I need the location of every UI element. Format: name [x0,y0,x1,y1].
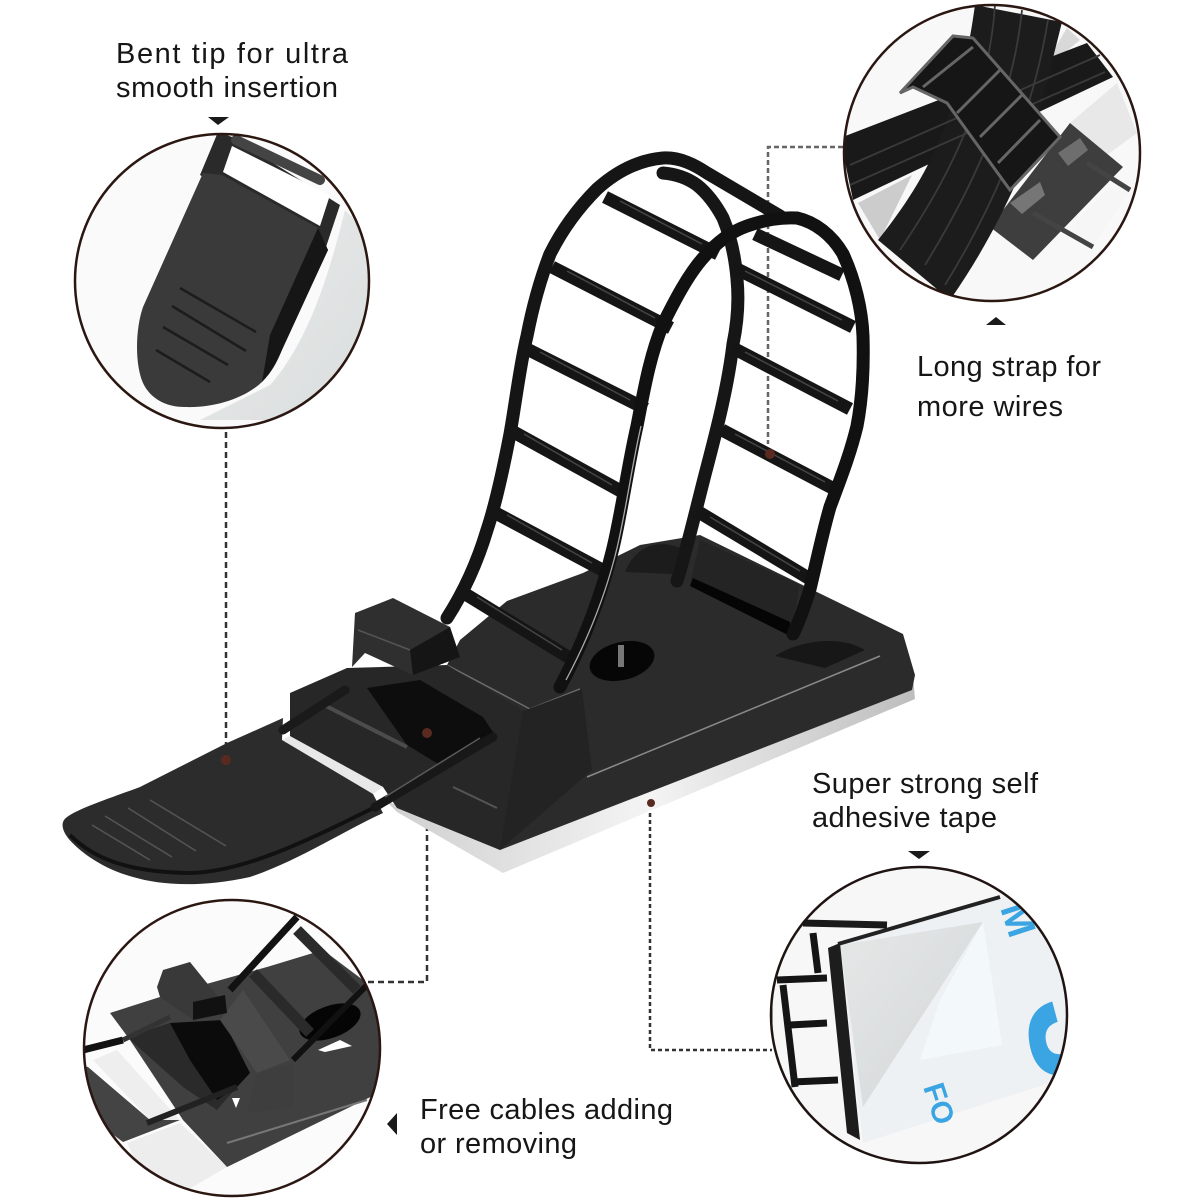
caption: free cables: or removing [420,1128,577,1160]
circle background [84,900,380,1196]
left rung highlights [477,201,702,650]
printed 3M logo fragment: 3 [992,979,1172,1091]
right ladder rungs [697,234,853,582]
caption: adhesive tape: Super strong self [812,768,1039,800]
frame recess [367,680,495,765]
outer rail [447,158,780,618]
circle outline [771,867,1067,1163]
main product: adjustable cable clip [63,158,915,884]
caption: free cables: Free cables adding [420,1094,673,1126]
strap tip lower rim [70,807,375,873]
riser lower shadow [690,578,790,636]
lower ledge highlight [453,787,497,808]
caption: long strap: more wires [917,391,1063,423]
leader line: bent tip [225,432,227,748]
strap rail highlight [385,738,480,797]
right foot mound [775,641,865,668]
connector dots [221,449,775,807]
leader line: long strap [768,147,843,444]
housing top edge highlight [447,665,580,709]
strap tip [63,718,383,884]
back mound [625,544,680,574]
arrow: bent tip [208,117,229,125]
circle outline [84,900,380,1196]
arrow: adhesive tape [908,851,930,859]
base plate edge highlight [587,656,880,777]
detail circle: free cables lock [80,900,385,1200]
adhesive tape layer [385,675,915,873]
strap and cables contents [840,5,1137,300]
lock contents [80,917,385,1200]
arrow: long strap [986,317,1006,325]
tape contents [772,895,1066,1142]
circle background [844,5,1140,301]
slider head [352,598,460,675]
arrow: free cables [387,1113,397,1135]
leader line: free cables [368,735,427,982]
white gap in slot [282,736,383,794]
white slit [707,529,803,579]
base plate [395,535,915,850]
front rail highlight [566,426,641,680]
circle background [771,867,1067,1163]
tip ribs [92,800,226,860]
strap side rail, upper [283,690,345,730]
right rung highlights [710,271,842,571]
circle outline [844,5,1140,301]
tip contents [137,132,375,420]
circle outline [75,134,369,428]
leader line: adhesive tape [650,806,772,1050]
front rail [560,218,863,687]
detail circle: long strap around cables [840,5,1140,301]
circle background [75,134,369,428]
printed FO fragment: FO [916,1079,961,1129]
detail circle: adhesive tape [770,866,1068,1164]
lock housing front [485,689,592,850]
screw hole [585,635,659,687]
printed M fragment: M [991,897,1044,942]
detail circle: bent tip [75,132,375,428]
strap back rail [663,173,738,581]
caption: long strap: Long strap for [917,351,1101,383]
slider frame [290,665,523,850]
caption: bent tip: smooth insertion [116,72,338,104]
left ladder rungs [462,197,718,663]
strap side rail, lower [375,737,493,807]
right riser block [690,540,800,636]
caption: bent tip: Bent tip for ultra [116,38,349,70]
caption: adhesive tape: adhesive tape [812,802,997,834]
frame crossbar [320,703,407,747]
